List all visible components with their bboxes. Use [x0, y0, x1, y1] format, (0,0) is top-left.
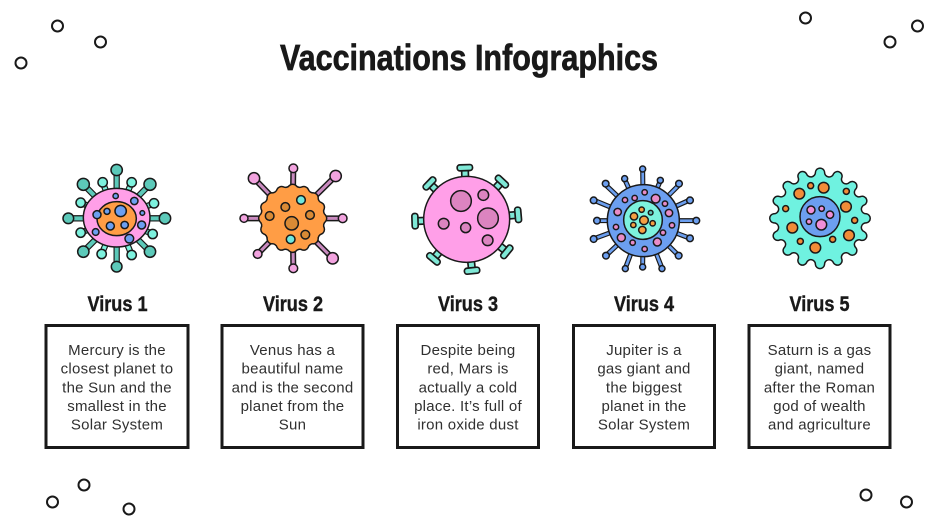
label: Virus 4: Virus 4 [614, 293, 674, 316]
description: Virus 1: closest planet to [61, 361, 173, 378]
description: Virus 5: god of wealth [773, 398, 866, 415]
description: Virus 2: beautiful name [242, 361, 343, 378]
icon: virus 1 [63, 164, 171, 272]
text box: Virus 1 [46, 326, 188, 448]
label: Virus 3: Virus 3 [438, 293, 498, 316]
icon: virus 4 [590, 166, 700, 272]
text box: Virus 5 [749, 326, 890, 448]
decorative dots bottom right [860, 490, 912, 508]
description: Virus 2: Sun [279, 417, 306, 434]
description: Virus 3: iron oxide dust [417, 417, 519, 434]
description: Virus 3: red, Mars is [427, 361, 509, 378]
description: Virus 1: smallest in the [67, 398, 167, 415]
icon: virus 3 [412, 164, 522, 274]
text box: Virus 4 [574, 326, 714, 448]
description: Virus 5: giant, named [775, 361, 864, 378]
panel: Virus 5 [749, 164, 890, 448]
text box: Virus 2 [222, 326, 363, 448]
description: Virus 3: actually a cold [419, 379, 517, 396]
description: Virus 1: Solar System [71, 417, 163, 434]
description: Virus 1: Mercury is the [68, 342, 166, 359]
description: Virus 3: Despite being [421, 342, 515, 359]
description: Virus 4: Jupiter is a [606, 342, 682, 359]
description: Virus 1: the Sun and the [62, 379, 172, 396]
title: Vaccinations Infographics [280, 37, 658, 78]
decorative dots bottom left [47, 480, 134, 514]
description: Virus 4: Solar System [598, 417, 690, 434]
icon: virus 5 [765, 164, 875, 273]
decorative dots top left [16, 20, 106, 68]
description: Virus 2: Venus has a [250, 342, 336, 359]
description: Virus 5: after the Roman [764, 379, 875, 396]
panel: Virus 4 [574, 166, 714, 447]
label: Virus 5: Virus 5 [790, 293, 850, 316]
panel: Virus 2 [222, 164, 363, 448]
description: Virus 2: and is the second [232, 379, 353, 396]
description: Virus 5: Saturn is a gas [768, 342, 871, 359]
panel: Virus 1 [46, 164, 188, 447]
description: Virus 2: planet from the [241, 398, 344, 415]
description: Virus 3: place. It’s full of [414, 398, 523, 415]
description: Virus 5: and agriculture [768, 417, 871, 434]
description: Virus 4: the biggest [606, 379, 683, 396]
label: Virus 2: Virus 2 [263, 293, 323, 316]
icon: virus 2 [240, 164, 347, 273]
decorative dots top right [800, 12, 923, 48]
label: Virus 1: Virus 1 [88, 293, 148, 316]
panel: Virus 3 [398, 164, 538, 447]
description: Virus 4: planet in the [602, 398, 686, 415]
description: Virus 4: gas giant and [597, 361, 691, 378]
text box: Virus 3 [398, 326, 538, 448]
